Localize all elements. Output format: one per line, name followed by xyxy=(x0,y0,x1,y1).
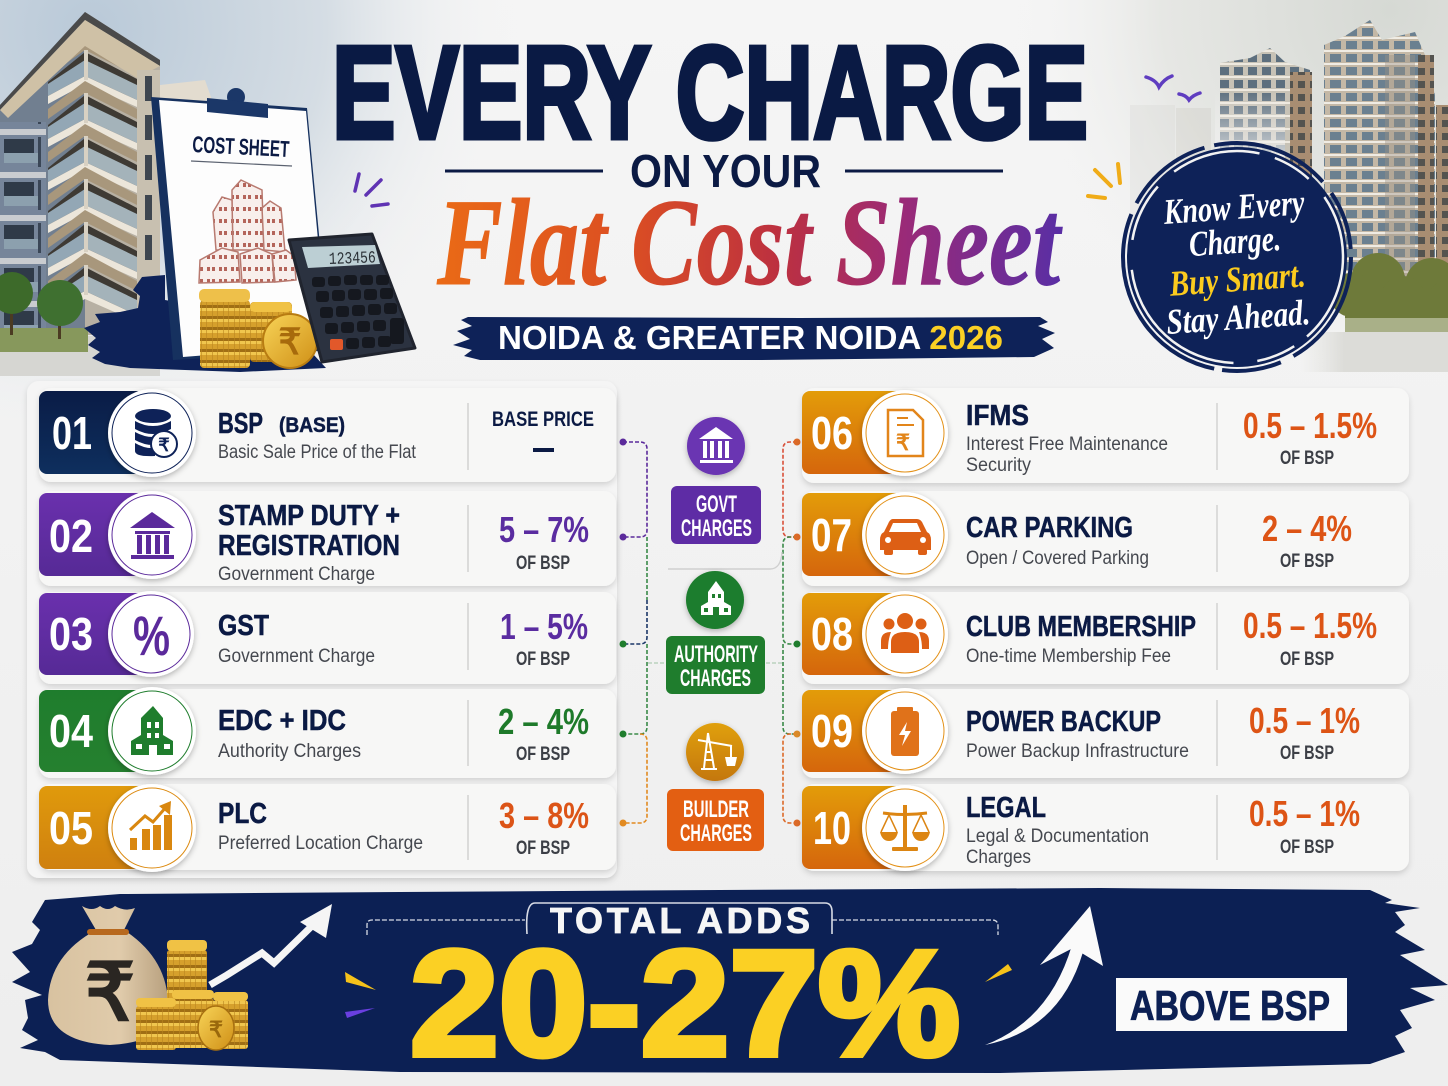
icon: coins database xyxy=(108,389,196,477)
icon: authority circle xyxy=(686,571,744,629)
trees right xyxy=(1330,253,1448,322)
row 09 power backup: POWER BACKUP xyxy=(966,706,1161,738)
total adds label: TOTAL ADDS xyxy=(550,900,810,941)
row 08 club membership: One-time Membership Fee xyxy=(966,646,1171,667)
connectors between rows and category column xyxy=(623,442,797,823)
row 01 BSP: BASE PRICE xyxy=(492,408,594,431)
row 08 club membership: CLUB MEMBERSHIP xyxy=(966,611,1196,643)
heading: Flat Cost Sheet: Flat Cost Sheet xyxy=(436,174,1063,311)
row 02 stamp duty: Government Charge xyxy=(218,564,375,585)
row 02 stamp duty: STAMP DUTY + xyxy=(218,500,400,532)
icon: coins database: ₹ xyxy=(158,435,170,455)
category: govt charges: GOVT xyxy=(696,491,737,518)
row 05 PLC xyxy=(39,784,616,872)
row 08 club membership: 08 xyxy=(811,608,853,660)
row 06 IFMS: Interest Free Maintenance xyxy=(966,434,1168,455)
row 09 power backup: 0.5 – 1% xyxy=(1249,700,1360,741)
icon: percent: % xyxy=(133,604,170,667)
illustration: calculator: 123456 xyxy=(329,249,376,270)
icon: people xyxy=(862,591,948,677)
row 01 BSP xyxy=(39,388,616,482)
money bag: ₹ xyxy=(85,948,135,1037)
above BSP tag: ABOVE BSP xyxy=(1130,982,1330,1029)
illustration: coin stacks xyxy=(199,289,317,368)
heading: EVERY CHARGE: EVERY CHARGE xyxy=(332,19,1088,166)
tagline text: Stay Ahead. xyxy=(1165,292,1311,342)
category: authority charges xyxy=(666,571,765,694)
birds xyxy=(1146,76,1200,100)
row 10 legal: 10 xyxy=(813,802,851,854)
row 04 EDC IDC: 2 – 4% xyxy=(498,701,589,742)
tagline text xyxy=(1157,182,1314,342)
decorative yellow spark xyxy=(1088,164,1120,198)
row 09 power backup: 09 xyxy=(811,705,853,757)
curved white arrow xyxy=(985,906,1103,1045)
row 09 power backup: Power Backup Infrastructure xyxy=(966,741,1189,762)
category: authority charges: CHARGES xyxy=(680,665,751,692)
heading: ON YOUR: ON YOUR xyxy=(630,145,821,197)
money bag xyxy=(48,906,168,1045)
row 03 GST: GST xyxy=(218,610,269,642)
row 02 stamp duty: OF BSP xyxy=(516,553,570,574)
big percentage figure: 20-27% xyxy=(410,919,960,1086)
row 06 IFMS: OF BSP xyxy=(1280,448,1334,469)
bottom total banner xyxy=(12,888,1448,1086)
icon: authority building xyxy=(108,687,196,775)
category: builder charges: BUILDER xyxy=(683,796,749,823)
icon: battery xyxy=(862,688,948,774)
decorative purple spark xyxy=(355,174,388,206)
row 03 GST: Government Charge xyxy=(218,646,375,667)
row 04 EDC IDC: 04 xyxy=(49,705,93,757)
tagline text: Know Every xyxy=(1162,182,1307,232)
icon: scales xyxy=(862,785,948,871)
row 04 EDC IDC: EDC + IDC xyxy=(218,705,346,737)
row 07 car parking: OF BSP xyxy=(1280,551,1334,572)
row 10 legal: Charges xyxy=(966,847,1031,868)
row 04 EDC IDC: OF BSP xyxy=(516,744,570,765)
row 02 stamp duty: 02 xyxy=(49,510,93,562)
row 10 legal: 0.5 – 1% xyxy=(1249,793,1360,834)
row 05 PLC: 3 – 8% xyxy=(499,795,589,836)
total adds frame xyxy=(367,903,998,935)
cost sheet heading: COST SHEET xyxy=(192,131,290,162)
category: builder charges xyxy=(667,723,764,851)
row 01 BSP: BSP xyxy=(218,408,263,440)
row 05 PLC: Preferred Location Charge xyxy=(218,833,423,854)
row 03 GST xyxy=(39,591,616,684)
row 02 stamp duty: 5 – 7% xyxy=(499,509,589,550)
row 10 legal xyxy=(802,784,1409,871)
row 06 IFMS: 0.5 – 1.5% xyxy=(1243,405,1377,446)
icon: growth chart xyxy=(108,784,196,872)
tagline badge xyxy=(1123,143,1351,371)
row 08 club membership: OF BSP xyxy=(1280,649,1334,670)
icon: govt circle xyxy=(687,417,745,475)
panel backing: left list xyxy=(27,381,617,878)
row 06 IFMS xyxy=(802,388,1409,483)
brush stroke behind clipboard xyxy=(84,275,326,372)
row 07 car parking: 2 – 4% xyxy=(1262,508,1352,549)
row 01 BSP: (BASE) xyxy=(279,414,345,437)
row 06 IFMS: Security xyxy=(966,455,1031,476)
category: govt charges xyxy=(671,417,761,544)
illustration: apartment building left xyxy=(0,12,212,376)
row 01 BSP: 01 xyxy=(52,407,92,459)
trees xyxy=(0,272,83,339)
icon: rupee document: ₹ xyxy=(896,430,910,455)
sketch of buildings xyxy=(199,180,296,283)
illustration: high-rise towers right xyxy=(1130,20,1448,372)
row 10 legal: Legal & Documentation xyxy=(966,826,1149,847)
icon: percent xyxy=(108,591,194,677)
row 01 BSP: Basic Sale Price of the Flat xyxy=(218,442,417,463)
connector dots xyxy=(620,438,800,826)
row 09 power backup: OF BSP xyxy=(1280,743,1334,764)
row 07 car parking: Open / Covered Parking xyxy=(966,548,1149,569)
category: builder charges: CHARGES xyxy=(680,820,752,847)
row 07 car parking xyxy=(802,491,1409,586)
illustration: calculator xyxy=(289,234,415,362)
row 10 legal: LEGAL xyxy=(966,792,1046,824)
row 07 car parking: CAR PARKING xyxy=(966,512,1133,544)
row 02 stamp duty: REGISTRATION xyxy=(218,530,400,562)
row 09 power backup xyxy=(802,688,1409,778)
icon: car xyxy=(862,492,948,578)
row 07 car parking: 07 xyxy=(811,509,852,561)
location banner: NOIDA & GREATER NOIDA 2026 xyxy=(498,319,1003,356)
row 10 legal: OF BSP xyxy=(1280,837,1334,858)
zigzag growth arrow xyxy=(210,904,332,985)
row 02 stamp duty xyxy=(39,491,616,586)
row 03 GST: 1 – 5% xyxy=(500,606,588,647)
category: authority charges: AUTHORITY xyxy=(674,641,758,668)
illustration: cost sheet clipboard xyxy=(151,88,335,360)
row 03 GST: 03 xyxy=(49,608,93,660)
sparks xyxy=(345,964,1012,1018)
row 05 PLC: PLC xyxy=(218,798,267,830)
row 03 GST: OF BSP xyxy=(516,649,570,670)
category: govt charges: CHARGES xyxy=(681,515,752,542)
row 04 EDC IDC xyxy=(39,687,616,778)
row 06 IFMS: IFMS xyxy=(966,400,1029,432)
row 05 PLC: 05 xyxy=(49,802,93,854)
clip xyxy=(207,88,268,118)
rising coins xyxy=(136,940,248,1050)
icon: government building xyxy=(108,491,196,579)
row 05 PLC: OF BSP xyxy=(516,838,570,859)
icon: crane circle xyxy=(686,723,744,781)
icon: rupee document xyxy=(862,390,948,476)
tagline text: Buy Smart. xyxy=(1168,254,1307,304)
row 08 club membership: 0.5 – 1.5% xyxy=(1243,605,1377,646)
row 08 club membership xyxy=(802,591,1409,684)
rupee coin: ₹ xyxy=(279,321,301,362)
row 04 EDC IDC: Authority Charges xyxy=(218,741,361,762)
row 06 IFMS: 06 xyxy=(811,407,853,459)
rising coins: ₹ xyxy=(209,1017,223,1042)
tagline text: Charge. xyxy=(1188,218,1282,264)
